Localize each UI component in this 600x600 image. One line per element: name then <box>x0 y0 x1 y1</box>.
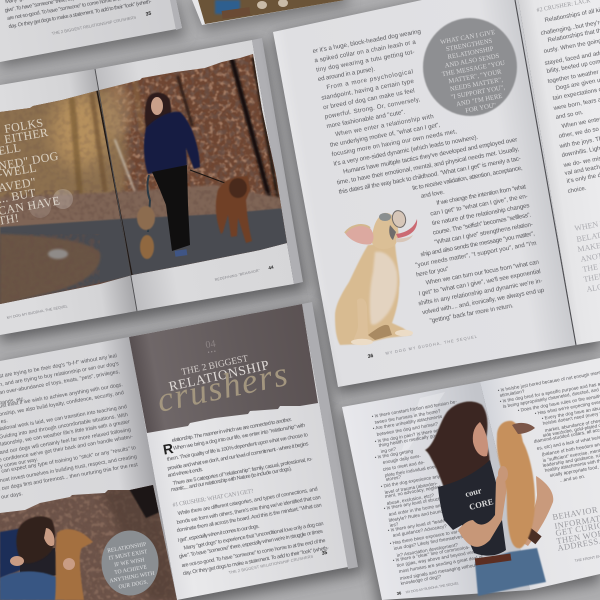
text block: main column: this dates all the way back to childhood. "What can I get" is merely a tac- <box>338 155 521 196</box>
photo: woman hugging dog <box>0 480 180 600</box>
footer: left page: MY DOG MY BUDDHA, THE SEQUEL <box>405 581 459 594</box>
text block: main column: er it's a huge, block-headed dog wearing <box>312 28 422 55</box>
callout: quote circle: STRENGTHENS <box>445 38 493 53</box>
callout: quote circle <box>423 18 517 118</box>
text block: right page <box>536 0 600 195</box>
left page <box>342 382 530 600</box>
sheen <box>395 392 445 470</box>
right page <box>95 40 294 311</box>
face <box>473 422 488 456</box>
figure: woman walking dogs <box>144 92 225 257</box>
tongue <box>396 219 417 238</box>
text block: left bullets: ing on? <box>380 446 397 454</box>
footer: left page: 36 <box>396 590 402 596</box>
dog: small tan <box>497 421 535 548</box>
spine line <box>95 69 137 311</box>
text block: chapter body: provide and what we don't, and our level of commitment - where it begins <box>167 441 309 472</box>
text block: chapter body: dominate them all across the board. And this is the mindset: "What can <box>176 503 322 534</box>
shirt print: cour <box>464 485 483 499</box>
text block: chapter body: elationship. The manner in which we are connected to another. <box>171 417 292 444</box>
leaf ground <box>0 185 290 228</box>
eye mask <box>379 213 391 221</box>
footer: top-left page: 35 <box>145 11 152 18</box>
hand <box>498 466 508 482</box>
chapter dots: • • • <box>207 349 216 356</box>
text block: chapter body: I get", especially when it comes to our dogs. <box>177 524 260 544</box>
panel: bottom-right spread with woman and small dog <box>342 358 600 600</box>
callout: quote circle: RELATIONSHIP <box>447 46 494 61</box>
body <box>335 242 412 345</box>
dog <box>55 529 93 600</box>
text block: left bullets: knowledge of dog)? <box>400 574 442 586</box>
text block: chapter body: There are 5 categories of "relationship": family, casual, professional, ro- <box>172 456 313 487</box>
text block: left bullets: and guidance? Advocacy? <box>392 523 447 538</box>
text block: main column: more fashionable and "cute". <box>326 109 406 130</box>
text block: left bullets: • Has there been exposure to var- <box>389 529 460 546</box>
jeans <box>475 548 546 596</box>
chapter header band: RELATIONSHIP <box>167 357 270 394</box>
dog: small tan <box>137 206 155 259</box>
text block: left bullets: stores? <box>385 474 402 482</box>
callout: quote circle: "I SUPPORT YOU", <box>450 84 506 101</box>
text block: left bullets: • Did the dog experience any <box>380 474 441 489</box>
text block: left bullets: • Is the dog in pain? Is there any <box>374 427 442 444</box>
text block: main column: it's a very one-sided dynamic (which leads to nowhere). <box>333 134 479 168</box>
callout: relationship circle <box>102 530 158 596</box>
text block: main column: I get" to "what can I give", we'll see exponential <box>418 268 541 298</box>
text block: left bullets: ious dogs? Likely find themselves <box>393 534 464 551</box>
panel: center-left forest walk spread <box>0 38 307 342</box>
head <box>372 213 398 249</box>
chapter header band <box>129 304 318 433</box>
text block: left page <box>0 353 139 502</box>
text block: left bullets: abuse, exclusion, etc)? <box>386 493 435 506</box>
text block: main column: shifts in any relationship and dynamic we're in- <box>418 277 543 307</box>
panel: bottom-left spread, chapter opener <box>0 302 364 600</box>
text block: chapter body: mantic,... and our relationship with Nature (to include our dogs). <box>170 466 293 493</box>
text block: main column: volved with.... and, ironically, we always end up <box>422 287 545 316</box>
footer: right page: REDEFINING "BEHAVIOR" <box>214 268 261 282</box>
drop cap: R <box>162 440 175 458</box>
text block: main column: and love. <box>420 189 445 200</box>
text block: left bullets: tion (gias, way above and beyond verbal, <box>396 548 481 568</box>
footer: chapter page: THE 2 BIGGEST RELATIONSHIP CRUSHERS <box>228 554 314 575</box>
callout: quote circle: WHAT CAN I GIVE <box>440 29 496 46</box>
ear <box>345 225 374 244</box>
quote text on photo: EITHER <box>3 125 49 146</box>
text block: left bullets: enough daily exer- <box>382 453 422 465</box>
text block: main column: powerful. Strong. Or, conversely, <box>324 96 421 121</box>
text block: chapter body <box>159 414 330 577</box>
text block: right page: and so on. <box>555 110 584 121</box>
text block: main column: a spiked collar on a chain leash or a <box>314 39 417 64</box>
text block: chapter body: them. Their quality of life is 100% dependent upon what we choose to <box>167 432 308 463</box>
text block: left bullets: cise to meet and de- <box>382 460 425 472</box>
text block: left bullets: • Is the dog getting <box>374 448 414 460</box>
text block: main column: "What can I give" strengthens relation- <box>434 221 534 246</box>
callout: quote circle: THE MESSAGE "YOU <box>442 60 506 78</box>
leaf mound <box>0 234 100 305</box>
footer: right page: 44 <box>268 264 274 271</box>
text block: main column: tire nature of the relationship changes <box>431 202 530 227</box>
text block: chapter body: bonds we form with others, there's one thing we've identified that can <box>176 495 321 526</box>
footer: chapter page: 35 <box>321 550 328 557</box>
illustration: french bulldog puppy <box>335 209 417 345</box>
text block: chapter body: give". To have "someone" there, especially when we're in struggle or times <box>179 529 324 560</box>
text block: left bullets: • Is there any level of structure <box>383 495 447 511</box>
chapter title: THE 2 BIGGEST <box>181 354 249 378</box>
text block: main column: the underlying motive of, "what can I get", <box>329 122 441 149</box>
right page <box>129 304 348 600</box>
text block: left bullets: • Is there constant friction and tension be- <box>371 399 458 419</box>
text block: main column: standpoint, having a certain type <box>321 78 415 102</box>
text block: main column: or breed of dog can make us feel <box>323 87 415 111</box>
chest <box>370 252 398 325</box>
right page <box>480 358 600 590</box>
footer: page number and running title <box>367 334 478 360</box>
text block: right bullets <box>497 363 600 483</box>
panel: top-center photo fragment <box>190 0 350 31</box>
left page <box>273 0 576 387</box>
callout: relationship circle: ANYTHING WITH <box>109 571 155 584</box>
callout: quote circle: AND "I'M HERE <box>456 93 503 108</box>
text block: main column: When we can turn our focus from "what can <box>425 259 540 287</box>
golden haze <box>0 85 128 240</box>
callout: quote circle: AND ALSO SENDS <box>444 53 500 70</box>
text block: left bullets: level of trauma (abandon- <box>384 481 438 495</box>
haunch shadow <box>368 325 392 340</box>
text block: main column: tiny dog wearing a tutu getting tot- <box>316 49 415 74</box>
text block: main column <box>312 14 548 337</box>
text block: left bullets: between the dog and human? <box>376 421 439 437</box>
text block: chapter body: are not-so-good. To have "someone" to come home to at the end of the <box>181 538 326 569</box>
text block: main column: time, to have their emotional, mental, and physical needs met. Usually, <box>336 146 520 186</box>
text block: left bullets <box>371 399 487 586</box>
pull quote: behavior <box>552 503 600 553</box>
text block: left page: es. <box>0 418 8 425</box>
text block: left bullets: tween the humans in the home? <box>374 408 441 425</box>
text block: left bullets: mixed signals and messaging without their <box>399 561 487 581</box>
text block: left bullets: in? Association development? <box>396 542 459 558</box>
left page <box>0 337 177 600</box>
text block: chapter body: #1 CRUSHER: WHAT CAN I GET? <box>172 489 254 509</box>
text block: main column: here for you" <box>416 266 449 279</box>
left arm <box>458 474 508 547</box>
panel: center spread with puppy <box>273 0 600 394</box>
text block: main column: ship and also sends the message "you matter", <box>420 230 536 258</box>
footer: page number and running title: 36 <box>367 353 374 360</box>
text block: right bullets: ...and so on. <box>559 474 586 483</box>
spine line <box>515 0 576 345</box>
text block: left bullets: ies? <box>389 521 399 528</box>
text block: left bullets: • Are there unhealthy attachments <box>372 414 443 431</box>
text block: right page: choice. <box>567 186 587 195</box>
dog: brown standing <box>216 176 252 243</box>
callout: quote circle: FOR YOU" <box>465 102 497 115</box>
text block: left bullets: and order in the home and <box>388 502 444 517</box>
text block: main column: ed around in a purse). <box>317 66 376 83</box>
chapter script title: crushers <box>154 354 291 420</box>
page edge stack <box>252 38 303 284</box>
t-shirt <box>438 460 506 556</box>
right arm <box>518 476 553 546</box>
text block: left bullets: lifestyle? Rules and boundar- <box>388 507 449 523</box>
quote text on photo: FOLKS <box>3 115 44 136</box>
panel: top-left spread fragment <box>0 0 186 68</box>
callout: relationship circle: IT MUST EXIST <box>108 549 149 562</box>
photo: woman holding dog <box>425 401 553 596</box>
photo: woman holding dog: CORE <box>468 496 495 512</box>
figure: woman <box>0 528 20 578</box>
front leg <box>354 298 372 344</box>
text block: chapter body: When we bring a dog into our life, we enter into "relationship" with <box>173 423 306 452</box>
photo: legs and boots <box>198 0 344 24</box>
faint circles <box>53 189 73 209</box>
text block: chapter body: Many "get dogs" to experience that "unconditional love only a dog can <box>183 521 324 552</box>
left page <box>0 69 137 335</box>
footer: right page <box>214 264 274 282</box>
paws <box>351 339 373 345</box>
callout: relationship circle: OUR DOGS. <box>118 579 149 590</box>
callout: relationship circle: TO ACHIEVE <box>114 564 148 576</box>
text block: left bullets: thing health or medically go- <box>378 433 437 448</box>
text block: main column: If we change the intention from "what <box>436 183 527 207</box>
muzzle <box>391 209 407 229</box>
right page <box>515 0 600 345</box>
callout: relationship circle: IF WE WISH <box>114 557 145 568</box>
text block: main column: When we enter a relationship with <box>335 113 435 138</box>
text block: main column: From a more psychological <box>326 68 414 91</box>
text block: main column: can I get" to "what can I give", the en- <box>430 193 528 218</box>
text block: main column: "your needs matter", "I support you", and "I'm <box>415 240 537 269</box>
text block: chapter body: While there are different categories, and types of connections, and <box>177 486 318 517</box>
text block: main column: Humans have multiple tactics they've developed and employed over <box>343 136 518 176</box>
text block: left bullets: ment, no advocacy, neglect, <box>384 484 442 499</box>
footer: left page: MY DOG MY BUDDHA, THE SEQUEL <box>6 304 68 320</box>
callout: quote circle: MATTER", "YOUR <box>448 68 503 85</box>
text block: chapter body: and where it ends. <box>167 467 204 479</box>
text block: main column: tic to receive validation, attention, acceptance, <box>412 165 523 192</box>
page edge stack <box>302 302 358 569</box>
text block: main column: course. The "selfish" becomes "selfless". <box>432 211 532 237</box>
callout: relationship circle: RELATIONSHIP <box>107 542 147 554</box>
hair <box>425 401 490 507</box>
footer: page number and running title: MY DOG MY BUDDHA, THE SEQUEL <box>385 334 478 356</box>
quote text on photo <box>0 115 61 228</box>
text block: chapter body: day. Or they get dogs to make a statement. To add to their "look" (wheth- <box>183 545 330 577</box>
footer: top-left page: THE 2 BIGGEST RELATIONSHIP CRUSHERS <box>51 15 137 36</box>
text block: left bullets: • Is there a "clear" line of communica- <box>392 544 470 563</box>
text block: left bullets: most humans are sending a great deal of <box>398 554 484 574</box>
text block: left bullets: • Is there any level of "leadership" <box>387 516 457 533</box>
text block: left bullets: plete their individual energy <box>384 463 442 478</box>
text block: main column: focusing more on having our own needs met, <box>331 128 458 158</box>
dog ear <box>512 423 535 434</box>
pull quote: right page <box>574 218 600 294</box>
text block: right bullets: stimulation? <box>499 389 525 398</box>
spine gutter <box>96 85 132 276</box>
text block: main column: "getting" back far more in return. <box>429 302 514 325</box>
road <box>0 208 290 304</box>
callout: quote circle: NEEDS MATTER", <box>449 76 504 93</box>
photo: forest walk <box>0 50 300 310</box>
chapter number: 04 <box>205 339 216 351</box>
